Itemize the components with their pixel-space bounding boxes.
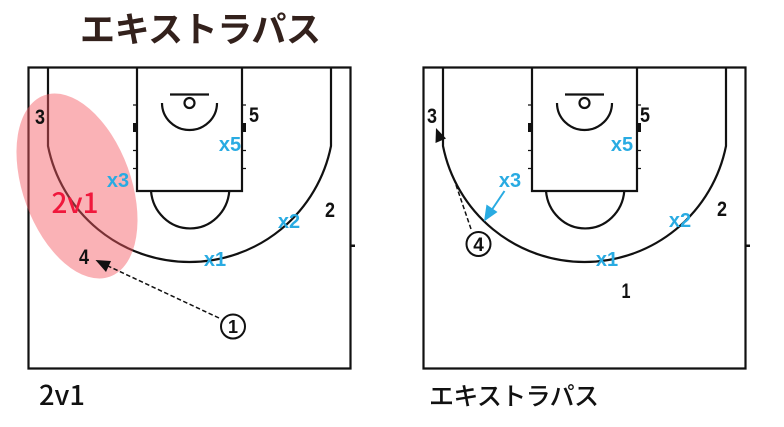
player 5: 5 <box>640 104 650 127</box>
free throw arc <box>151 191 229 228</box>
player 3: 3 <box>35 106 45 129</box>
key <box>137 68 242 191</box>
court outline <box>28 68 350 368</box>
player 4 with ball <box>466 232 490 256</box>
pass arrow <box>96 260 219 318</box>
three-point line <box>48 68 331 262</box>
free throw arc <box>546 191 624 228</box>
court outline <box>424 68 746 368</box>
defender closeout arrow <box>484 191 504 222</box>
three-point line <box>443 68 726 262</box>
player 1 with ball: 1 <box>228 317 238 337</box>
hoop and backboard <box>162 94 217 130</box>
player 1: 1 <box>622 280 631 303</box>
player 1 with ball <box>221 314 245 338</box>
player 3: 3 <box>427 105 437 128</box>
caption: extra pass: エキストラパス <box>429 377 599 413</box>
pass arrow <box>436 128 471 229</box>
panel: left court 2v1 <box>0 68 355 368</box>
defender x5: x5 <box>219 134 241 156</box>
defender x1: x1 <box>204 249 226 271</box>
defender x5: x5 <box>611 134 633 156</box>
defender x1: x1 <box>596 249 618 271</box>
defender x3: x3 <box>107 170 129 192</box>
label: 2v1 in zone: 2v1 <box>52 182 98 222</box>
highlight ellipse <box>0 77 161 295</box>
key <box>532 68 637 191</box>
player 2: 2 <box>717 198 727 221</box>
defender x2: x2 <box>669 210 691 232</box>
player 4 with ball: 4 <box>473 235 484 256</box>
caption: 2v1: 2v1 <box>39 374 85 413</box>
lane ticks <box>528 105 750 247</box>
hoop and backboard <box>557 94 612 130</box>
lane ticks <box>133 105 355 247</box>
title: エキストラパス <box>80 2 321 53</box>
defender x2: x2 <box>278 211 300 233</box>
panel: right court extra pass <box>424 68 750 368</box>
player 2: 2 <box>325 199 335 222</box>
player 4: 4 <box>79 246 89 269</box>
defender x3: x3 <box>499 170 521 192</box>
player 5: 5 <box>249 104 259 127</box>
